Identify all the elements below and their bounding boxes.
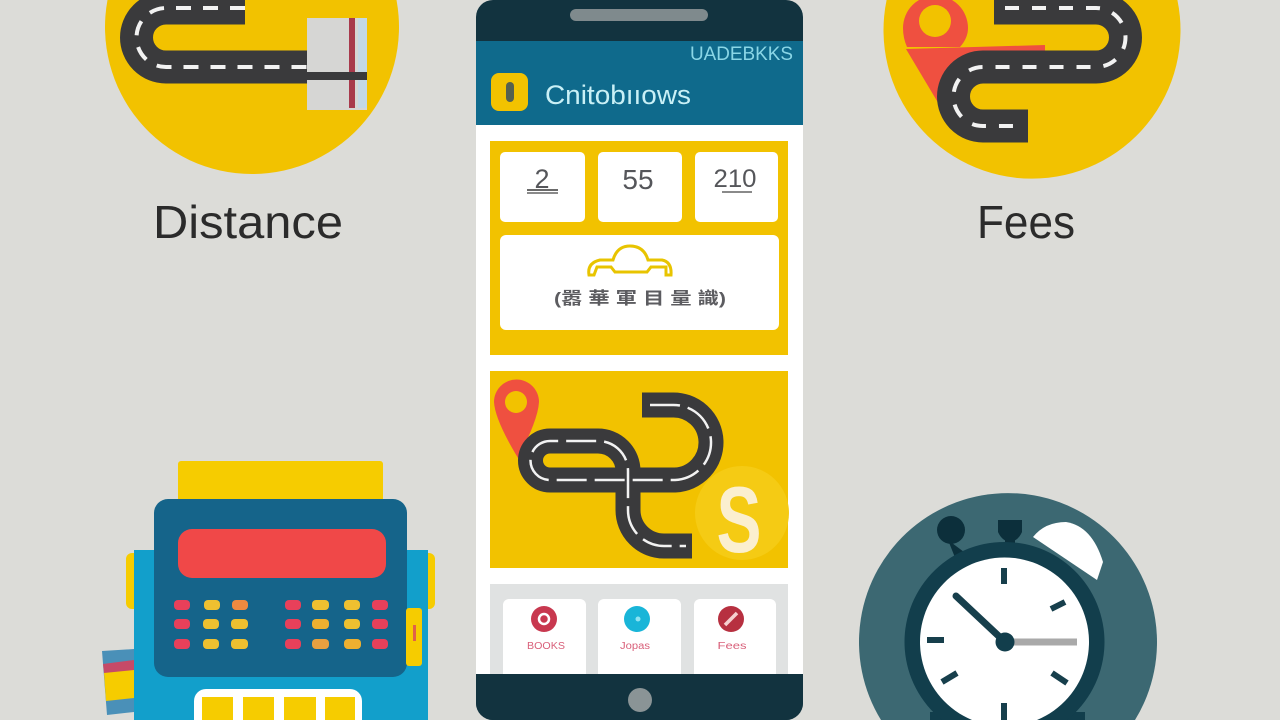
app icon bbox=[491, 73, 528, 111]
machine body bbox=[134, 550, 428, 720]
phone mockup bbox=[476, 0, 803, 720]
paper bbox=[178, 461, 383, 503]
red display bbox=[178, 529, 386, 578]
icon: toll machine bbox=[102, 461, 435, 720]
stat card 1: 2 bbox=[534, 164, 550, 194]
keypad bbox=[174, 600, 388, 649]
app title: Cnitobııows bbox=[545, 80, 691, 110]
icon: distance road badge bbox=[105, 0, 399, 174]
phone shell bbox=[476, 0, 803, 720]
route summary card bbox=[500, 235, 779, 330]
route summary text: (嚣 華 軍 目 量 識) bbox=[554, 289, 726, 308]
icon: alarm clock bbox=[859, 493, 1157, 720]
side bumps bbox=[126, 553, 435, 609]
stat card 3 bbox=[695, 152, 778, 222]
home button bbox=[628, 688, 652, 712]
clock white bell bbox=[1033, 522, 1103, 580]
side card slot bbox=[406, 608, 422, 666]
receipt tray bbox=[194, 689, 362, 720]
icon: vehicle outline bbox=[589, 246, 671, 275]
stat card 3: 210 bbox=[714, 165, 756, 193]
action card 1: BOOKS bbox=[527, 641, 565, 652]
clock bell knobs bbox=[937, 516, 1022, 560]
icon: fees road badge bbox=[884, 0, 1180, 179]
clock hands bbox=[956, 596, 1077, 652]
ticket bbox=[102, 649, 134, 715]
clock feet bbox=[930, 712, 1085, 720]
panel: action buttons bbox=[490, 584, 788, 674]
stat card 1 bbox=[500, 152, 585, 222]
stat card 2: 55 bbox=[622, 164, 654, 195]
action card 2 bbox=[598, 599, 681, 674]
coin with S: S bbox=[716, 467, 762, 572]
road bbox=[530, 405, 711, 546]
clock face bbox=[920, 558, 1089, 720]
clock ring bbox=[904, 542, 1104, 720]
clock badge bbox=[859, 493, 1157, 720]
action card 3 bbox=[694, 599, 776, 674]
action card 2: Jopas bbox=[620, 641, 650, 652]
action card 3: Fees bbox=[718, 641, 746, 652]
app header bbox=[476, 41, 803, 125]
phone speaker bbox=[570, 9, 708, 21]
header badge text: UADEBKKS bbox=[690, 44, 793, 65]
heading: Fees: Fees bbox=[977, 196, 1075, 248]
clock ticks bbox=[927, 568, 1067, 720]
action card 1 bbox=[503, 599, 586, 674]
panel: trip stats bbox=[490, 141, 788, 355]
panel: route map bbox=[490, 371, 789, 572]
control panel bbox=[154, 499, 407, 677]
heading: Distance: Distance bbox=[153, 196, 343, 248]
app body bbox=[476, 125, 803, 674]
stat card 2 bbox=[598, 152, 682, 222]
icon: location pin bbox=[494, 380, 539, 458]
phone bottom bar bbox=[476, 674, 803, 720]
coin with S bbox=[695, 466, 789, 572]
